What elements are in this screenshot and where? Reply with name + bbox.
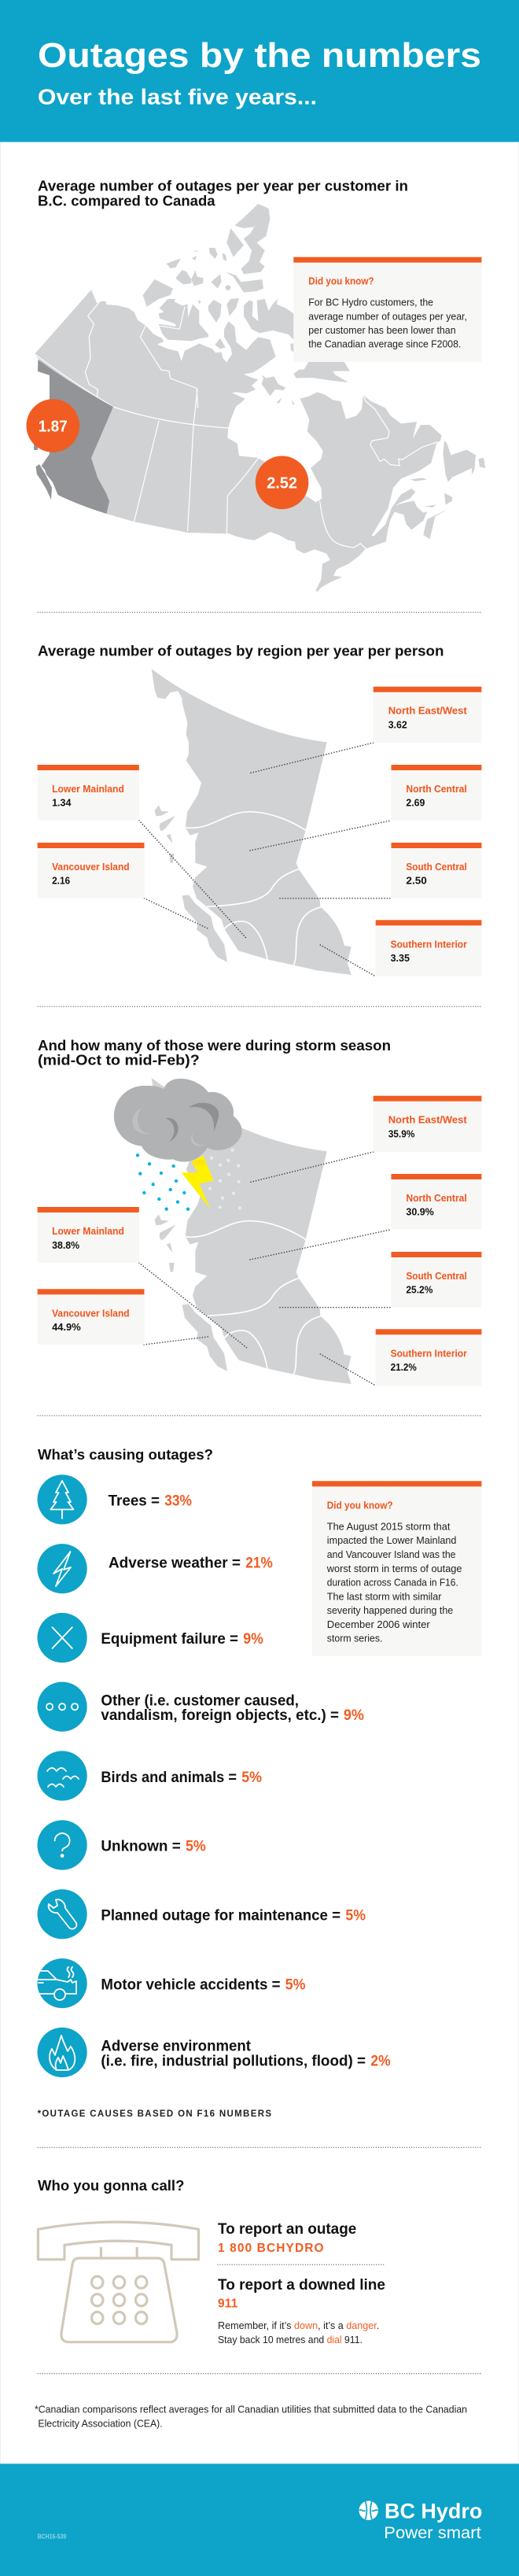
icon: telephone (38, 2222, 199, 2342)
card: South Central storm (392, 1252, 481, 1308)
footer banner (0, 2463, 519, 2576)
cause: adverse environment: (i.e. fire, industrial pollutions, flood) = (101, 2054, 366, 2070)
cause: trees: 33% (164, 1493, 192, 1509)
heading: by region: Average number of outages by region per year per person (38, 643, 444, 659)
cause: planned outage: Planned outage for maintenance = (101, 1908, 340, 1925)
contact: report a downed line: Remember, if it’s down, it’s a danger. (218, 2320, 379, 2331)
cause: unknown: Unknown = (101, 1839, 181, 1855)
callout: did you know, Canadian average: per customer has been lower than (308, 324, 456, 336)
cause: motor vehicle accidents: Motor vehicle accidents = (101, 1976, 280, 1993)
callout: did you know, August 2015 storm: The August 2015 storm that (327, 1520, 451, 1532)
header banner (0, 0, 519, 142)
cause: adverse weather (38, 1544, 273, 1593)
card: South Central (392, 843, 481, 899)
card: Vancouver Island: Vancouver Island (52, 861, 130, 873)
card: North East/West storm: 35.9% (388, 1128, 414, 1139)
cause: equipment failure (38, 1613, 263, 1663)
footnote: causes: *OUTAGE CAUSES BASED ON F16 NUMBERS (38, 2109, 271, 2119)
card: Southern Interior storm (376, 1329, 481, 1386)
card: North East/West (374, 687, 481, 743)
callout: did you know, August 2015 storm: December 2006 winter (327, 1618, 430, 1630)
map of B.C. regions (152, 669, 352, 975)
cause: other: Other (i.e. customer caused, (101, 1693, 299, 1710)
footnote: Canadian comparisons: Electricity Association (CEA). (38, 2417, 163, 2429)
callout: did you know, August 2015 storm: and Vancouver Island was the (327, 1548, 456, 1560)
storm illustration (114, 1079, 242, 1211)
callout: did you know, August 2015 storm: severity happened during the (327, 1604, 453, 1616)
card: North Central: 2.69 (406, 798, 425, 809)
card: Southern Interior: 3.35 (391, 953, 410, 964)
heading: storm season (38, 1038, 391, 1068)
cause: adverse weather: Adverse weather = (109, 1555, 241, 1571)
card: North East/West: North East/West (388, 705, 467, 717)
cause: equipment failure: Equipment failure = (101, 1631, 238, 1648)
card: North East/West: 3.62 (388, 719, 407, 730)
card: North Central (392, 765, 481, 821)
cause: birds and animals: 5% (241, 1770, 262, 1786)
heading: who you gonna call: Who you gonna call? (38, 2178, 184, 2194)
bubble: B.C. average (27, 399, 79, 452)
cause: birds and animals (38, 1751, 262, 1801)
card: North Central: North Central (406, 783, 467, 795)
cause: adverse environment: 2% (370, 2054, 391, 2070)
card: Lower Mainland: Lower Mainland (52, 783, 124, 795)
card: South Central: South Central (406, 861, 467, 873)
cause: trees: Trees = (109, 1493, 160, 1509)
card: North East/West storm (374, 1096, 481, 1152)
bubble: Canada average (256, 456, 308, 509)
region: British Columbia highlighted (34, 360, 113, 514)
card: North East/West storm: North East/West (388, 1114, 467, 1126)
callout: did you know, Canadian average (293, 257, 481, 362)
heading: causes: What’s causing outages? (38, 1447, 213, 1463)
card: Vancouver Island: 2.16 (52, 876, 70, 887)
callout: did you know, August 2015 storm: The last storm with similar (327, 1590, 442, 1602)
map of Canada (27, 204, 485, 592)
cause: motor vehicle accidents: 5% (285, 1976, 306, 1993)
cause: birds and animals: Birds and animals = (101, 1770, 237, 1786)
cause: unknown (38, 1820, 206, 1870)
cause: adverse weather: 21% (245, 1555, 273, 1571)
cause: other: vandalism, foreign objects, etc.) = (101, 1707, 339, 1724)
callout: did you know, August 2015 storm: worst storm in terms of outage (326, 1563, 462, 1574)
card: Southern Interior storm: Southern Interior (391, 1347, 467, 1359)
card: Vancouver Island (38, 843, 144, 899)
card: South Central storm: 25.2% (406, 1285, 432, 1296)
contact: report a downed line: 911 (218, 2297, 238, 2311)
card: Southern Interior (376, 920, 481, 976)
cause: other: 9% (344, 1707, 364, 1724)
lightning bolt (182, 1155, 214, 1209)
card: North Central storm: North Central (406, 1192, 467, 1204)
contact: report an outage (218, 2221, 356, 2255)
contact: report a downed line: Stay back 10 metres and dial 911. (218, 2334, 363, 2345)
BC Hydro logo (359, 2500, 482, 2542)
map of B.C. storm season (152, 1078, 352, 1384)
card: Vancouver Island storm: Vancouver Island (52, 1307, 130, 1319)
job code: BCH16-539 (38, 2534, 67, 2541)
callout: did you know, Canadian average: For BC Hydro customers, the (308, 296, 433, 308)
cause: planned outage: 5% (345, 1908, 366, 1925)
title: Outages by the numbers (38, 36, 481, 75)
card: Vancouver Island storm: 44.9% (52, 1322, 81, 1333)
card: Lower Mainland storm (38, 1207, 139, 1263)
cause: equipment failure: 9% (243, 1631, 263, 1648)
cause: adverse environment: Adverse environment (101, 2039, 252, 2055)
heading: B.C. compared to Canada: Average number of outages per year per customer in (38, 179, 408, 194)
contact: report an outage: 1 800 BCHYDRO (218, 2242, 324, 2255)
storm cloud (114, 1079, 242, 1162)
card: South Central: 2.50 (406, 876, 427, 887)
card: North Central storm (392, 1174, 481, 1230)
card: Vancouver Island storm (38, 1289, 144, 1345)
callout: did you know, August 2015 storm: duration across Canada in F16. (327, 1576, 458, 1588)
rain drops over land (208, 1148, 241, 1209)
callout: did you know, August 2015 storm: storm series. (327, 1633, 382, 1644)
callout: did you know, Canadian average: average number of outages per year, (308, 311, 467, 323)
card: Lower Mainland (38, 765, 139, 821)
card: Lower Mainland storm: 38.8% (52, 1240, 79, 1251)
card: Lower Mainland: 1.34 (52, 798, 72, 809)
BC Hydro logo: BC Hydro (385, 2500, 482, 2523)
cause: unknown: 5% (186, 1839, 206, 1855)
callout: did you know, Canadian average: the Canadian average since F2008. (308, 338, 461, 350)
footnote: Canadian comparisons (35, 2404, 467, 2429)
cause: trees (38, 1474, 192, 1524)
contact: report an outage: To report an outage (218, 2221, 356, 2238)
BC Hydro logo: Power smart (384, 2524, 481, 2542)
cause: other (38, 1682, 364, 1732)
cause: planned outage (38, 1889, 366, 1939)
rain drops (136, 1153, 190, 1211)
callout: did you know, August 2015 storm: Did you know? (327, 1499, 393, 1511)
contact: report a downed line (218, 2277, 385, 2345)
contact: report a downed line: To report a downed line (218, 2277, 385, 2294)
card: North Central storm: 30.9% (406, 1207, 434, 1218)
bubble: B.C. average: 1.87 (39, 418, 68, 435)
heading: B.C. compared to Canada (38, 179, 408, 209)
cause: adverse environment (38, 2028, 391, 2077)
leader lines: storm (139, 1152, 392, 1386)
heading: storm season: And how many of those were during storm season (38, 1038, 391, 1054)
card: Southern Interior storm: 21.2% (391, 1362, 417, 1373)
leader lines: regions (139, 743, 392, 976)
callout: did you know, August 2015 storm: impacted the Lower Mainland (327, 1534, 456, 1546)
card: Southern Interior: Southern Interior (391, 938, 467, 950)
footnote: Canadian comparisons: *Canadian comparisons reflect averages for all Canadian utilities that submitted data to the Canadian (35, 2404, 467, 2415)
card: South Central storm: South Central (406, 1270, 467, 1282)
card: Lower Mainland storm: Lower Mainland (52, 1225, 124, 1237)
callout: did you know, Canadian average: Did you know? (308, 275, 374, 287)
subtitle: Over the last five years... (38, 85, 317, 109)
cause: motor vehicle accidents (38, 1958, 306, 2008)
heading: B.C. compared to Canada: B.C. compared to Canada (38, 194, 216, 209)
bubble: Canada average: 2.52 (267, 475, 297, 493)
heading: storm season: (mid-Oct to mid-Feb)? (38, 1052, 200, 1068)
callout: did you know, August 2015 storm (312, 1481, 481, 1656)
